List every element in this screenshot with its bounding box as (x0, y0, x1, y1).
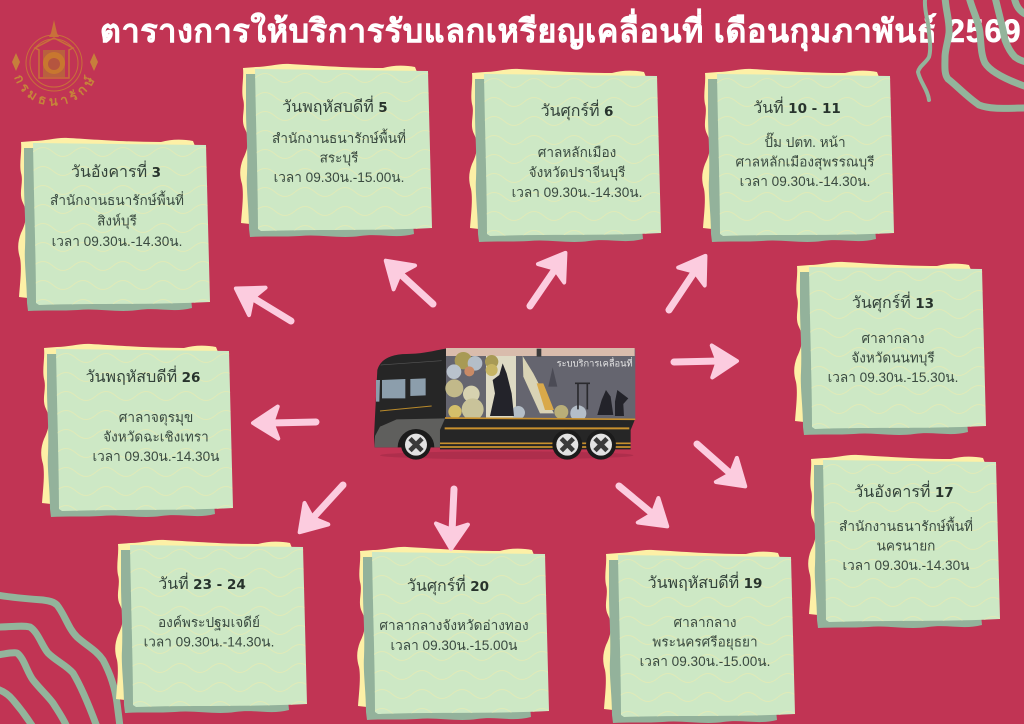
schedule text: เวลา 09.30น.-14.30น. (144, 634, 274, 650)
heading: Tuesday 17: วันอังคารที่ 17 (854, 480, 954, 501)
panel: Friday 6 (469, 69, 661, 242)
logo: Treasury Department emblem (12, 20, 98, 106)
panel: 23-24 (115, 540, 307, 713)
heading: Thursday 5: วันพฤหัสบดีที่ 5 (282, 95, 388, 116)
truck: wheels (398, 429, 616, 460)
schedule text: เวลา 09.30น.-14.30น (843, 558, 969, 573)
truck: silhouettes (490, 363, 514, 416)
arrow to Thursday 5 (375, 249, 433, 304)
squiggle decoration: bottom left (0, 595, 120, 724)
schedule text: เวลา 09.30น.-14.30น. (52, 234, 182, 249)
schedule text: เวลา 09.30น.-15.30น. (828, 370, 958, 385)
heading: 23-24: วันที่ 23 - 24 (158, 572, 246, 593)
arrow to Friday 6 (530, 244, 579, 306)
heading: Tuesday 3: วันอังคารที่ 3 (71, 160, 161, 181)
schedule text: เวลา 09.30น.-15.00น. (640, 654, 770, 669)
title: ตารางการให้บริการรับแลกเหรียญเคลื่อนที่ เดือนกุมภาพันธ์ 2569 (100, 8, 1022, 52)
schedule text: ศาลากลางจังหวัดอ่างทอง (379, 618, 529, 633)
schedule text: ปั๊ม ปตท. หน้า (764, 135, 846, 150)
arrow to 23-24 (288, 485, 343, 543)
arrow to Thursday 19 (619, 486, 678, 539)
panel: Thursday 19 (603, 550, 795, 723)
schedule text: สิงห์บุรี (97, 212, 137, 230)
panel: Thursday 5 (240, 64, 432, 237)
squiggle decoration: top right (918, 0, 1024, 108)
truck: cab (374, 349, 446, 447)
arrow to Tuesday 3 (228, 275, 291, 321)
arrows radiating from the truck (228, 244, 756, 550)
heading: Thursday 26: วันพฤหัสบดีที่ 26 (86, 365, 200, 386)
schedule text: สำนักงานธนารักษ์พื้นที่ (839, 519, 973, 534)
schedule text: สำนักงานธนารักษ์พื้นที่ (50, 193, 184, 208)
truck illustration (374, 348, 635, 460)
arrow to Thursday 26 (253, 407, 316, 439)
arrow to Friday 13 (674, 345, 737, 377)
logo: Treasury Department emblem: กรมธนารักษ์ (14, 74, 94, 106)
schedule text: สระบุรี (320, 150, 358, 166)
schedule text: จังหวัดนนทบุรี (851, 350, 935, 366)
schedule text: องค์พระปฐมเจดีย์ (158, 615, 260, 630)
schedule text: พระนครศรีอยุธยา (652, 634, 758, 650)
schedule text: เวลา 09.30น.-15.00น. (274, 170, 404, 185)
panel: Friday 13 (794, 262, 986, 435)
schedule text: เวลา 09.30น.-15.00น (391, 638, 517, 653)
schedule text: นครนายก (877, 538, 935, 554)
schedule text: ศาลากลาง (861, 331, 925, 346)
heading: Thursday 19: วันพฤหัสบดีที่ 19 (648, 571, 762, 592)
panel: 10-11 (702, 69, 894, 242)
truck: cargo panel (446, 349, 635, 419)
arrow to Tuesday 17 (697, 444, 756, 498)
truck: coins (455, 352, 472, 369)
schedule text: ศาลาจตุรมุข (119, 410, 193, 425)
truck: side text: ระบบริการเคลื่อนที่ (557, 357, 633, 369)
schedule text: เวลา 09.30น.-14.30น. (740, 174, 870, 189)
schedule text: ศาลหลักเมืองสุพรรณบุรี (736, 154, 874, 170)
schedule text: ศาลากลาง (673, 615, 737, 630)
panel: Tuesday 17 (808, 455, 1000, 628)
schedule text: จังหวัดฉะเชิงเทรา (103, 430, 209, 444)
panel: Thursday 26 (41, 344, 233, 517)
heading: Friday 6: วันศุกร์ที่ 6 (541, 99, 613, 121)
arrow to 10-11 (669, 247, 719, 310)
schedule text: สำนักงานธนารักษ์พื้นที่ (272, 131, 406, 146)
panel: Friday 20 (357, 547, 549, 720)
heading: Friday 20: วันศุกร์ที่ 20 (407, 574, 489, 596)
schedule text: เวลา 09.30น.-14.30น. (512, 185, 642, 200)
schedule text: จังหวัดปราจีนบุรี (529, 165, 625, 181)
schedule text: ศาลหลักเมือง (538, 145, 616, 160)
heading: 10-11: วันที่ 10 - 11 (753, 96, 841, 117)
arrow to Friday 20 (435, 489, 468, 550)
schedule text: เวลา 09.30น.-14.30น (93, 449, 219, 464)
truck: body stripes (440, 419, 635, 449)
heading: Friday 13: วันศุกร์ที่ 13 (852, 291, 934, 313)
panel: Tuesday 3 (18, 138, 210, 311)
